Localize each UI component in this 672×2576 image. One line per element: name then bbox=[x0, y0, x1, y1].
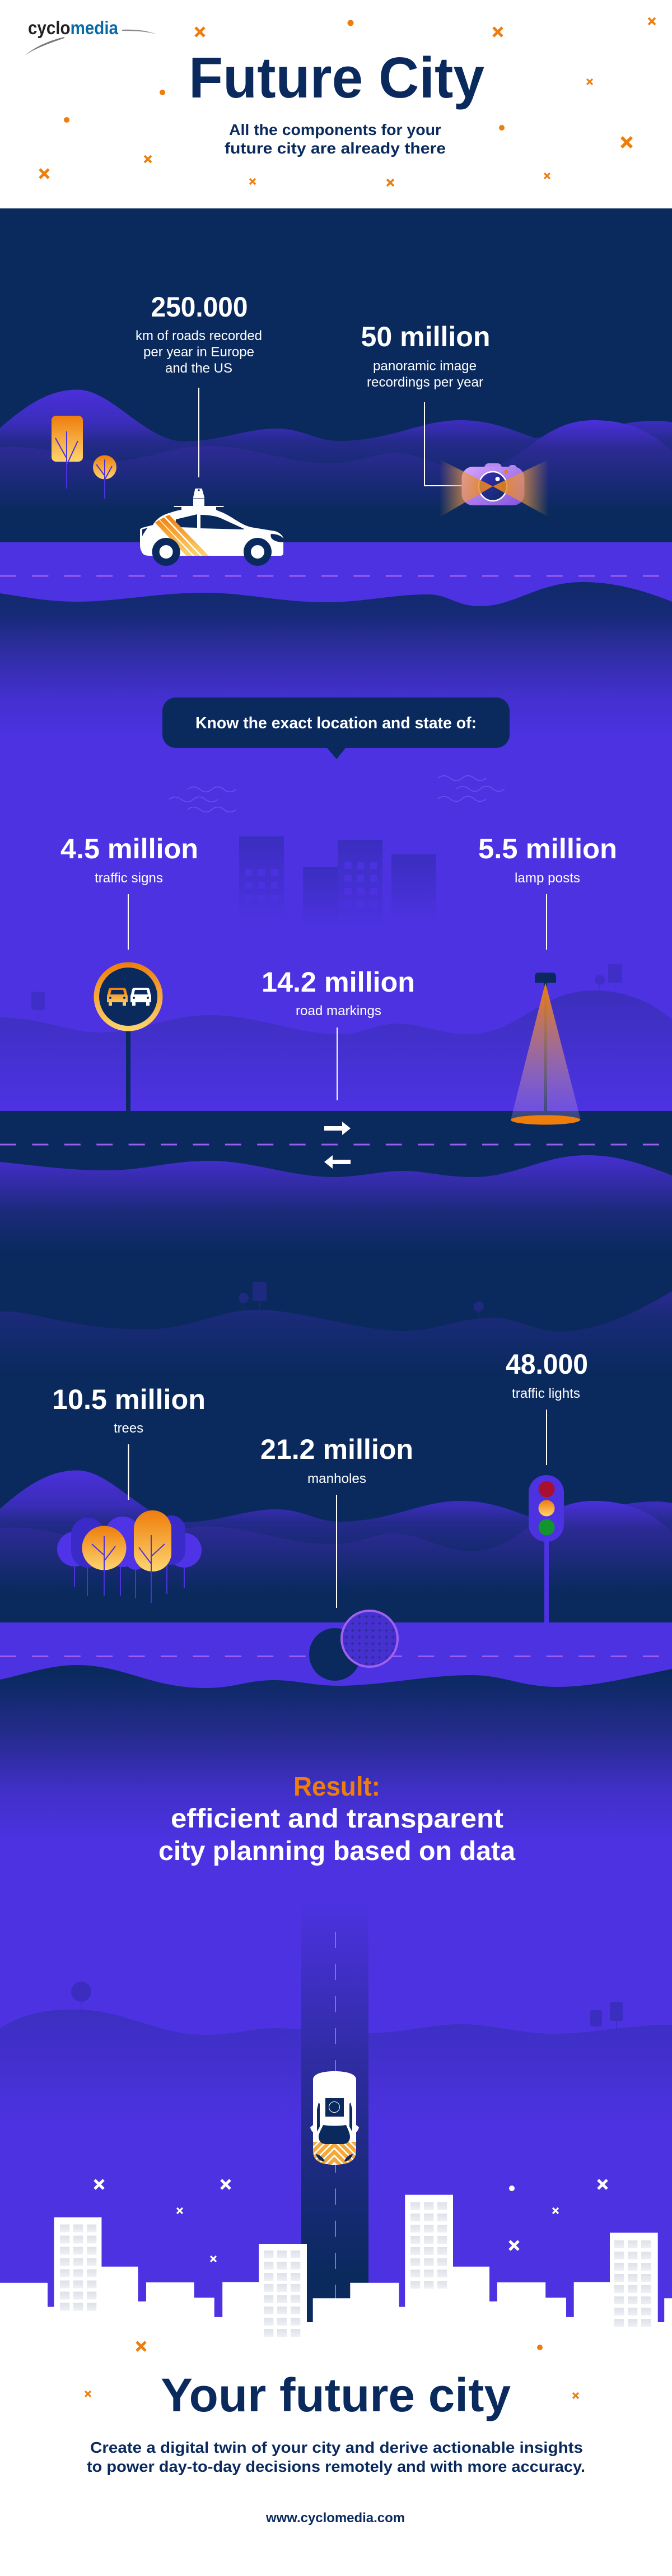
stat: 250.000 km of roads: and the US bbox=[165, 361, 232, 376]
stat: 14.2 million road markings: road markings bbox=[296, 1003, 381, 1019]
logo: cyclomedia bbox=[25, 17, 156, 55]
stat: 10.5 million trees: trees bbox=[114, 1421, 143, 1436]
icon: orange trees bbox=[52, 416, 116, 499]
hood chevrons bbox=[313, 2142, 356, 2165]
result heading: efficient and transparent bbox=[171, 1804, 503, 1834]
stat: 50 million panoramic images: recordings per year bbox=[367, 375, 483, 390]
icon: camera bbox=[440, 459, 549, 517]
section 4 background bbox=[0, 1148, 672, 1625]
footer heading: Your future city bbox=[161, 2369, 511, 2421]
stat: 14.2 million road markings: 14.2 million bbox=[262, 966, 415, 998]
icon: left arrow bbox=[324, 1155, 351, 1169]
stat: 21.2 million manholes: 21.2 million bbox=[260, 1434, 413, 1465]
header decorative marks bbox=[40, 18, 655, 186]
stat: 250.000 km of roads bbox=[136, 291, 262, 477]
footer description bbox=[87, 2439, 585, 2475]
hill: result section bbox=[0, 2010, 672, 2157]
icon: right arrow bbox=[324, 1122, 351, 1135]
result heading bbox=[158, 1772, 515, 1866]
footer description: to power day-to-day decisions remotely and with more accuracy. bbox=[87, 2458, 585, 2475]
stat: 50 million panoramic images: 50 million bbox=[361, 321, 491, 352]
stat: 48.000 traffic lights: 48.000 bbox=[506, 1349, 588, 1380]
icon: recording car side view bbox=[140, 489, 283, 566]
stat: 10.5 million trees: 10.5 million bbox=[52, 1384, 206, 1415]
callout: know the exact location bbox=[162, 698, 510, 759]
result heading: city planning based on data bbox=[158, 1836, 515, 1866]
skyline stars bbox=[95, 2180, 607, 2262]
title: Future City bbox=[189, 45, 484, 110]
stat: 250.000 km of roads: 250.000 bbox=[151, 291, 248, 323]
stat: 5.5 million lamp posts: 5.5 million bbox=[478, 833, 617, 864]
footer decorative marks bbox=[85, 2342, 578, 2398]
icon: traffic light bbox=[529, 1475, 564, 1625]
stat: 10.5 million trees bbox=[52, 1384, 206, 1500]
icon: orange car bbox=[107, 988, 128, 1006]
hill: traffic section bbox=[0, 991, 672, 1111]
panel: data collection bbox=[0, 208, 672, 1115]
subtitle: All the components for your bbox=[229, 121, 441, 138]
stat: 250.000 km of roads: km of roads recorded bbox=[136, 328, 262, 343]
road 3 bbox=[0, 1622, 672, 1688]
faded city buildings bbox=[239, 836, 436, 931]
stat: 50 million panoramic images bbox=[361, 321, 491, 486]
hill: distant navy bbox=[0, 1291, 672, 1401]
stat: 21.2 million manholes: manholes bbox=[307, 1471, 366, 1486]
wind lines bbox=[169, 775, 505, 812]
skyline bbox=[0, 2195, 672, 2576]
icon: lamp post bbox=[511, 973, 581, 1125]
stat: 48.000 traffic lights bbox=[506, 1349, 588, 1465]
hills back bbox=[0, 390, 672, 515]
result heading: Result: bbox=[293, 1772, 380, 1802]
faded background trees bbox=[239, 1282, 484, 1318]
section 5 background bbox=[0, 1653, 672, 2328]
icon: car top view bbox=[310, 2071, 359, 2165]
icon: white car bbox=[130, 988, 151, 1006]
stat: 14.2 million road markings bbox=[262, 966, 415, 1100]
faded background trees bbox=[71, 1982, 623, 2035]
faded background trees bbox=[31, 964, 622, 1020]
stat: 4.5 million traffic signs: traffic signs bbox=[95, 871, 163, 886]
callout: know the exact location: Know the exact location and state of: bbox=[195, 714, 477, 732]
website url: www.cyclomedia.com bbox=[265, 2510, 405, 2526]
icon: traffic sign bbox=[94, 962, 162, 1112]
subtitle bbox=[225, 121, 446, 157]
subtitle: future city are already there bbox=[225, 140, 446, 157]
logo: cyclomedia: cyclomedia bbox=[28, 17, 119, 38]
stat: 4.5 million traffic signs bbox=[60, 833, 198, 950]
stat: 250.000 km of roads: per year in Europe bbox=[143, 345, 254, 360]
vertical road bbox=[301, 1899, 368, 2325]
road 2 bbox=[0, 1111, 672, 1177]
stat: 4.5 million traffic signs: 4.5 million bbox=[60, 833, 198, 864]
stat: 21.2 million manholes bbox=[260, 1434, 413, 1608]
hills: trees section bbox=[0, 1470, 672, 1596]
stat: 5.5 million lamp posts bbox=[478, 833, 617, 950]
stat: 50 million panoramic images: panoramic image bbox=[373, 359, 477, 374]
hills front bbox=[0, 420, 672, 515]
road 1 bbox=[0, 542, 672, 1115]
icon: manhole bbox=[309, 1611, 398, 1681]
footer description: Create a digital twin of your city and derive actionable insights bbox=[90, 2439, 583, 2456]
icon: tree group bbox=[57, 1510, 202, 1603]
stat: 5.5 million lamp posts: lamp posts bbox=[515, 871, 580, 886]
stat: 48.000 traffic lights: traffic lights bbox=[512, 1386, 580, 1401]
